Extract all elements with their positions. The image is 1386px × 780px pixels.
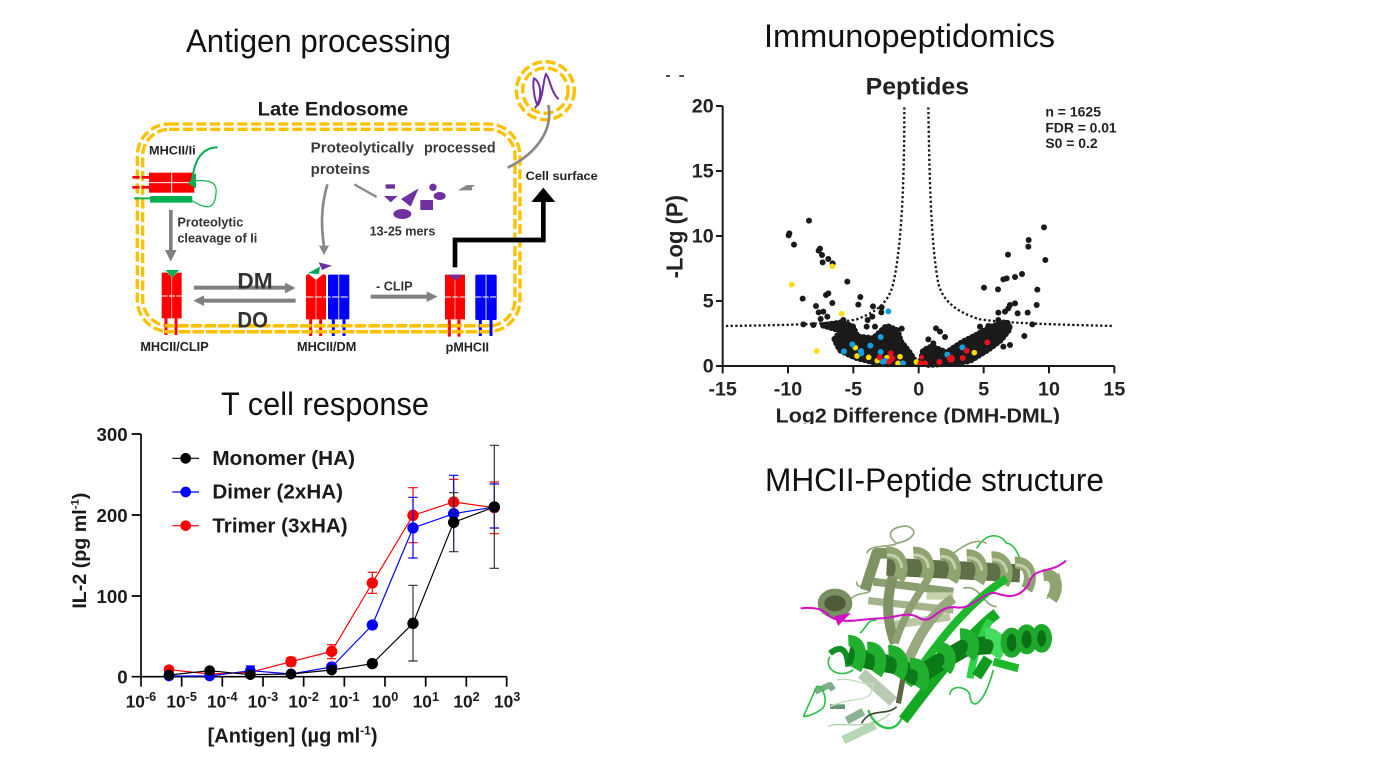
axes [716,106,1114,373]
red peptide points [877,339,990,366]
y axis tick labels: 0 [703,356,714,378]
label: Proteolytic cleavage of Ii: Proteolytic [177,216,243,230]
chart: T cell response dose curves [69,424,520,748]
sage beta strands [888,570,953,703]
arrow: DO [193,295,296,306]
black peptide points [786,218,1048,350]
blue peptide points [841,308,965,366]
series: monomer [164,445,500,680]
label: Proteolytically processed proteins: Proteolytically [311,140,415,157]
x axis tick labels: 5 [978,378,989,400]
y axis label: -1 [70,499,82,509]
x axis label: Log2 Difference (DMH-DML) [776,405,1060,428]
arrow: DM [194,283,296,293]
x axis tick labels [708,378,1125,400]
significance threshold curves [726,107,1114,326]
x axis tick labels: -1 [348,690,360,704]
green beta strands [903,578,1018,720]
arrow: proteolysis to peptides [354,184,475,197]
axes [132,434,507,687]
arrow: minus CLIP [371,291,438,302]
x axis tick labels: 10 [494,692,513,712]
x axis label: ) [371,726,377,748]
curved arrow from vesicle [508,105,549,168]
panel: antigen processing diagram [132,62,598,354]
sage helix highlights [888,555,1030,577]
stats note [1045,104,1117,151]
y axis tick labels: 15 [692,161,714,183]
x axis tick labels: 10 [207,692,226,712]
label: DO: DO [237,307,268,332]
chart: volcano plot of peptides [662,74,1125,432]
faded back strands [815,673,893,740]
title: T cell response: T cell response [221,386,429,422]
x axis tick labels: 10 [126,692,145,712]
label: Proteolytically processed proteins [311,140,496,178]
label: MHCII/DM: MHCII/DM [297,340,356,354]
x axis tick labels: -3 [267,690,278,704]
MHCII/CLIP molecule [162,270,182,335]
legend: Dimer (2xHA) [212,482,343,504]
label: MHCII/CLIP: MHCII/CLIP [140,340,209,354]
x axis tick labels: 0 [391,690,398,704]
bright green loops [803,536,1020,728]
label: - CLIP: - CLIP [376,280,413,294]
black peptide cloud [823,322,1010,365]
x axis tick labels: 10 [453,692,473,712]
y axis tick labels: 200 [97,505,128,526]
label: Proteolytically processed proteins: proteins [311,161,370,178]
stats note: FDR = 0.01 [1045,119,1117,135]
x axis tick labels: 15 [1103,378,1125,400]
x axis tick labels: 10 [329,692,348,712]
x axis tick labels: 10 [288,692,308,712]
x axis tick labels: -5 [186,690,197,704]
label: MHCII/Ii: MHCII/Ii [149,143,196,157]
x axis tick labels [126,690,520,712]
x axis tick labels: -2 [308,690,319,704]
y axis tick labels: 5 [703,291,714,313]
y axis tick labels: 20 [692,96,714,118]
y axis tick labels: 10 [692,226,714,248]
x axis tick labels: 10 [413,692,432,712]
x axis tick labels: -10 [774,378,802,400]
legend [172,448,355,537]
x axis tick labels: 10 [166,692,186,712]
green helix [830,627,1049,688]
label: 13-25 mers: 13-25 mers [370,224,435,238]
title: Immunopeptidomics: Immunopeptidomics [764,18,1055,54]
series: dimer [164,475,500,681]
x axis tick labels: 10 [372,692,391,712]
x axis tick labels: 0 [913,378,924,400]
x axis tick labels: 3 [513,690,520,704]
legend: Monomer (HA) [212,448,355,470]
chart title: Peptides: Peptides [866,74,969,101]
label: pMHCII: pMHCII [446,340,489,354]
y axis tick labels: 0 [117,667,128,688]
peptides [384,184,446,219]
yellow peptide points [789,263,977,366]
y axis label: IL-2 (pg ml [69,509,91,609]
pMHCII molecule [445,275,497,337]
y axis tick labels [97,424,128,688]
series: trimer [164,479,500,679]
legend: Trimer (3xHA) [212,515,348,537]
y axis tick labels [692,96,714,378]
x axis tick labels: -6 [145,690,156,704]
small cropped marks [666,73,684,78]
y axis tick labels: 300 [97,424,128,445]
x axis tick labels: 10 [248,692,267,712]
label: Proteolytically processed proteins: processed [424,140,496,157]
stats note: n = 1625 [1045,104,1101,120]
x axis tick labels: -4 [226,690,238,704]
x axis label: [Antigen] (µg ml [208,726,360,748]
title: MHCII-Peptide structure: MHCII-Peptide structure [765,462,1104,498]
label: DM: DM [237,269,273,294]
stats note: S0 = 0.2 [1045,135,1098,151]
heading: Late Endosome: Late Endosome [258,100,408,121]
x axis tick labels: 10 [1038,378,1060,400]
x axis tick labels: -5 [845,378,862,400]
x axis tick labels: 1 [432,690,439,704]
MHCII/Ii complex [132,147,218,207]
label: Cell surface: Cell surface [526,169,598,183]
x axis tick labels: -15 [708,378,737,400]
MHCII/DM molecule [306,262,349,336]
sage helix [821,553,1056,615]
y axis tick labels: 100 [97,586,128,607]
y axis label: -Log (P) [662,195,688,278]
title: Antigen processing: Antigen processing [186,23,451,59]
x axis label: -1 [360,724,371,738]
label crop mask [770,424,1070,432]
late endosome membrane [137,124,520,332]
x axis tick labels: 2 [473,690,480,704]
figure: MHCII-peptide ribbon structure [801,526,1066,740]
arrow: proteins to MHCII/DM [319,184,329,255]
vesicle with protein [516,62,574,120]
sage loops [850,526,1060,607]
label: Proteolytic cleavage of Ii: cleavage of Ii [177,232,257,246]
bottom membrane overlay [165,326,493,332]
label: Proteolytic cleavage of Ii [177,216,257,246]
y axis label: ) [69,493,91,499]
peptide backbone [801,561,1066,625]
black arrow to cell surface [455,188,555,267]
arrow: Ii cleavage [165,210,177,262]
sage horizontal sheet [868,582,953,625]
